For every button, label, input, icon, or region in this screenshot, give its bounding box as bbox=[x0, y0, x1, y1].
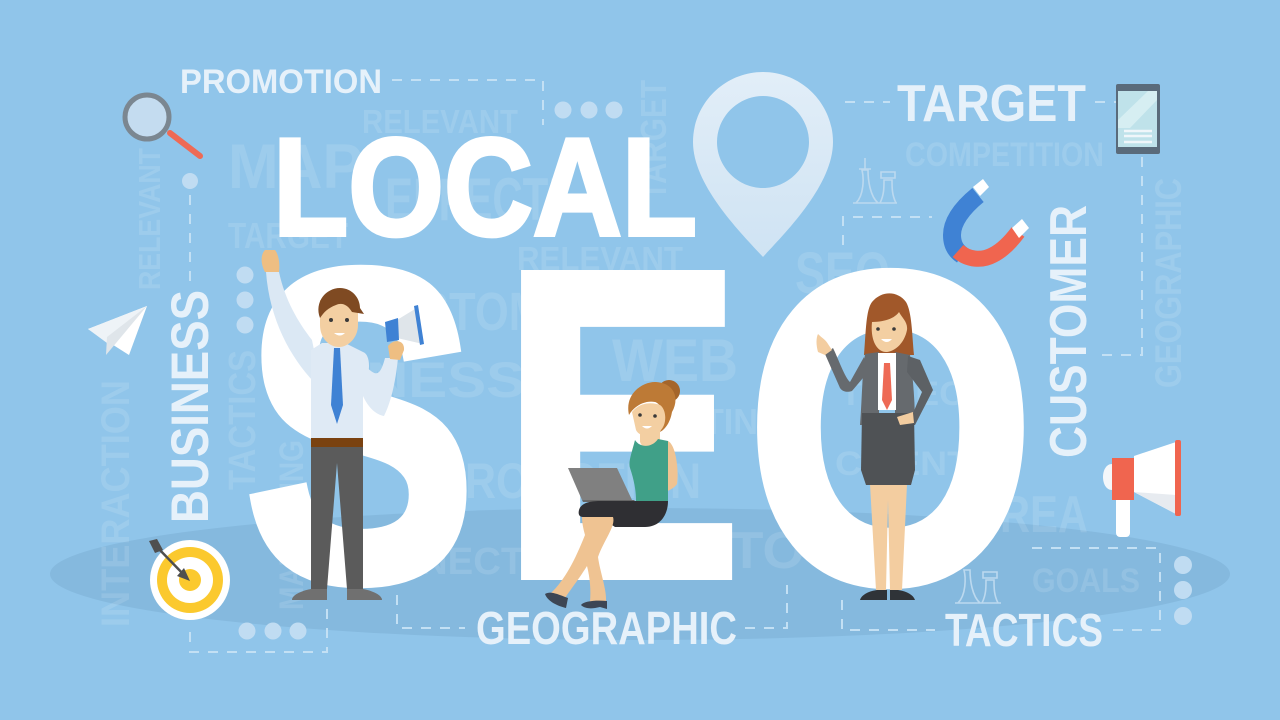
icon: chess pieces bottom bbox=[955, 570, 1001, 603]
faint background word cloud: MARKETING bbox=[273, 440, 311, 610]
keyword: CUSTOMER: CUSTOMER bbox=[1040, 205, 1098, 458]
figure: seated woman with laptop bbox=[545, 380, 680, 609]
skirt bbox=[861, 413, 915, 485]
faint background word cloud: GOALS bbox=[1032, 562, 1140, 600]
faint background word cloud: GEOGRAPHIC bbox=[1148, 178, 1189, 388]
heading: SEO big letters: E bbox=[500, 180, 743, 670]
left hand bbox=[816, 334, 832, 355]
icon: tablet bbox=[1116, 84, 1160, 154]
figure: standing woman in suit bbox=[816, 293, 933, 600]
faint background word cloud: TARGET bbox=[633, 80, 674, 200]
heading: SEO big letters bbox=[245, 180, 1034, 672]
face bbox=[632, 403, 665, 436]
faint background word cloud: COMPETITION bbox=[905, 136, 1104, 174]
faint background word cloud: INTERACTION bbox=[94, 380, 138, 627]
faint background word cloud: MAP bbox=[228, 132, 363, 202]
faint background word cloud: EFFECTI bbox=[385, 166, 560, 233]
eyes and mouth bbox=[329, 318, 349, 322]
decorative dot groups bbox=[182, 102, 1192, 640]
heading: LOCAL: LOCAL bbox=[273, 110, 697, 265]
faint background word cloud bbox=[94, 80, 1189, 627]
faint background word cloud: TO bbox=[730, 522, 805, 580]
raised arm bbox=[266, 272, 322, 390]
ground ellipse shadow bbox=[50, 508, 1230, 640]
figure: man with megaphone bbox=[262, 250, 424, 600]
heading: SEO big letters: O bbox=[747, 184, 1034, 672]
red tie bbox=[882, 363, 892, 410]
keyword: TARGET: TARGET bbox=[897, 75, 1086, 133]
neck and face bbox=[320, 300, 358, 347]
faint background word cloud: REA bbox=[1000, 486, 1088, 544]
keyword: GEOGRAPHIC: GEOGRAPHIC bbox=[476, 602, 737, 654]
skirt bbox=[579, 501, 668, 527]
icon: megaphone right bbox=[1103, 440, 1181, 537]
icon: paper plane bbox=[88, 306, 147, 355]
icon: chess pieces top bbox=[853, 158, 897, 203]
keyword: TACTICS: TACTICS bbox=[945, 604, 1103, 656]
faint background word cloud: TARGET bbox=[228, 215, 348, 256]
faint background word cloud: STOM bbox=[420, 282, 545, 342]
shirt bbox=[311, 343, 369, 438]
bare arm bbox=[630, 441, 678, 496]
faint background word cloud: SEO bbox=[795, 241, 890, 306]
keyword: PROMOTION: PROMOTION bbox=[180, 63, 382, 101]
faint background word cloud: WEB bbox=[612, 327, 738, 394]
white shirt bbox=[878, 353, 896, 410]
right arm bbox=[907, 356, 933, 425]
trousers bbox=[311, 447, 363, 589]
dashed connector lines bbox=[190, 80, 1160, 652]
hair bbox=[864, 293, 914, 355]
green top bbox=[629, 439, 668, 501]
megaphone bbox=[397, 309, 423, 344]
legs bbox=[870, 484, 907, 590]
legs bbox=[550, 517, 613, 602]
faint background word cloud: TOREC bbox=[840, 375, 965, 413]
icon: target with arrow bbox=[149, 539, 230, 620]
right arm bbox=[358, 358, 398, 416]
bun and hair bbox=[658, 380, 680, 402]
keyword: BUSINESS: BUSINESS bbox=[161, 290, 220, 523]
shoes bbox=[545, 593, 568, 608]
jacket bbox=[860, 352, 915, 425]
faint background word cloud: RELEVANT bbox=[517, 240, 683, 277]
hair bbox=[318, 288, 364, 318]
faint background word cloud: TACTICS bbox=[222, 350, 264, 490]
faint background word cloud: CLIENT bbox=[835, 445, 970, 483]
heading: SEO big letters: S bbox=[245, 180, 475, 671]
tie bbox=[331, 348, 343, 424]
faint background word cloud: INESS bbox=[350, 352, 525, 408]
faint background word cloud: ROMOTION bbox=[465, 453, 701, 509]
icon: magnifying glass bbox=[125, 95, 200, 156]
laptop bbox=[568, 468, 632, 500]
faint background word cloud: RELEVANT bbox=[362, 103, 518, 140]
faint background word cloud: ETIN bbox=[680, 401, 758, 442]
shoes bbox=[860, 590, 915, 600]
icon: location pin bbox=[693, 72, 833, 257]
hand on hip bbox=[897, 412, 914, 425]
belt bbox=[311, 438, 363, 447]
faint background word cloud: RELEVANT bbox=[132, 148, 167, 290]
icon: horseshoe magnet bbox=[952, 179, 1029, 259]
raised hand bbox=[262, 250, 279, 272]
left shoe and right shoe bbox=[292, 589, 382, 600]
face bbox=[872, 312, 907, 352]
neck bbox=[640, 428, 660, 450]
faint background word cloud: NECTI bbox=[420, 541, 535, 583]
left arm bbox=[825, 348, 868, 392]
hand on megaphone bbox=[388, 341, 404, 360]
